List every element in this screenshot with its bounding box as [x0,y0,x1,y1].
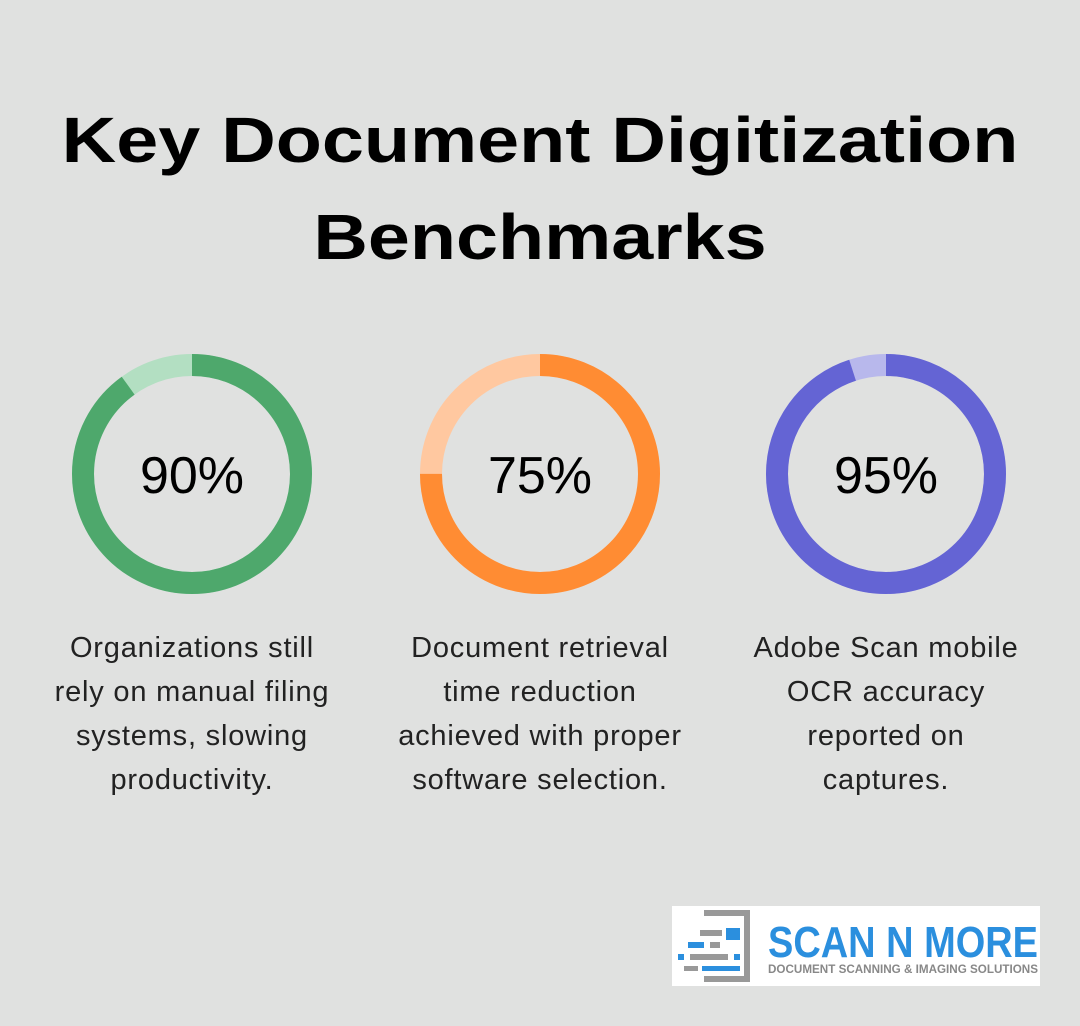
chart: 95% [777,365,995,583]
text: retrieval: Document retrieval time reduction achieved with proper software selection. [398,632,682,796]
text: adobe: Adobe Scan mobile OCR accuracy reported on captures. [753,632,1019,796]
title [62,104,1018,273]
chart: 95%: 95% [834,447,938,505]
chart: 75% [431,365,649,583]
chart: 90%: 90% [140,447,244,505]
icon: scanner [678,910,750,982]
logo [672,906,1040,986]
logo: DOCUMENT SCANNING & IMAGING SOLUTIONS [768,962,1038,976]
title: Benchmarks [313,201,767,273]
chart: 75%: 75% [488,447,592,505]
chart: 90% [83,365,301,583]
text: organizations: Organizations still rely on manual filing systems, slowing productivity. [55,632,329,796]
title: Key Document Digitization [62,104,1018,176]
